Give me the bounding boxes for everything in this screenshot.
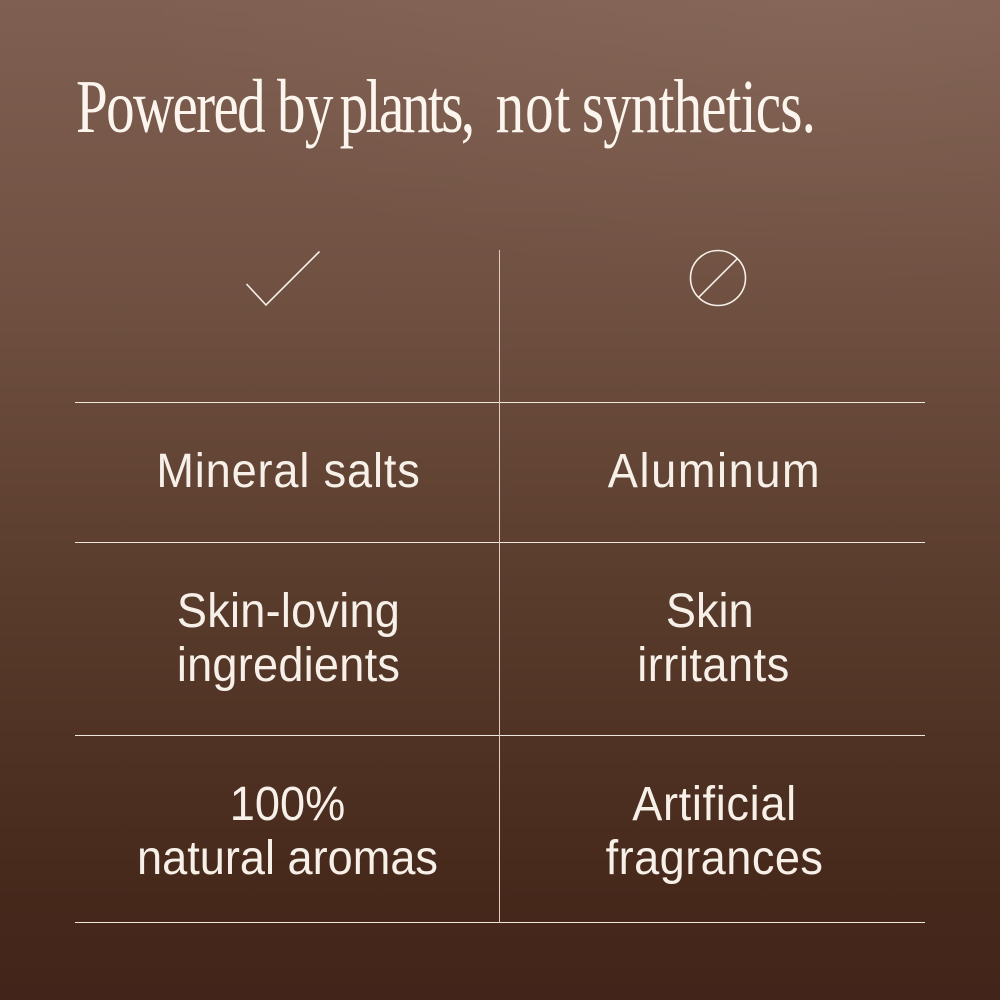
title: plants, <box>340 65 473 149</box>
row 2 left: Skin-loving ingredients: ingredients <box>177 639 400 692</box>
row 3 left: 100% natural aromas: 100% <box>230 778 345 831</box>
title: synthetics. <box>582 65 815 149</box>
row 3 right: Artificial fragrances: fragrances <box>606 832 823 885</box>
row 2 left: Skin-loving ingredients: Skin-loving <box>177 585 400 638</box>
row 2 left: Skin-loving ingredients <box>177 585 400 692</box>
row 1 right: Aluminum: Aluminum <box>608 445 821 498</box>
row 3 left: 100% natural aromas <box>137 778 438 885</box>
row 2 right: Skin irritants <box>637 585 790 692</box>
title: by <box>277 65 333 149</box>
row 3 right: Artificial fragrances <box>606 778 823 885</box>
title: not <box>496 65 571 149</box>
row 2 right: Skin irritants: irritants <box>637 639 790 692</box>
row 3 left: 100% natural aromas: natural aromas <box>137 832 438 885</box>
comparison table <box>75 250 925 923</box>
icon: prohibited sign <box>690 250 746 306</box>
title <box>76 65 815 149</box>
title: Powered <box>76 65 264 149</box>
row 1 left: Mineral salts: Mineral salts <box>156 445 420 498</box>
icon: check mark <box>246 250 320 306</box>
row 3 right: Artificial fragrances: Artificial <box>632 778 797 831</box>
row 2 right: Skin irritants: Skin <box>666 585 754 638</box>
